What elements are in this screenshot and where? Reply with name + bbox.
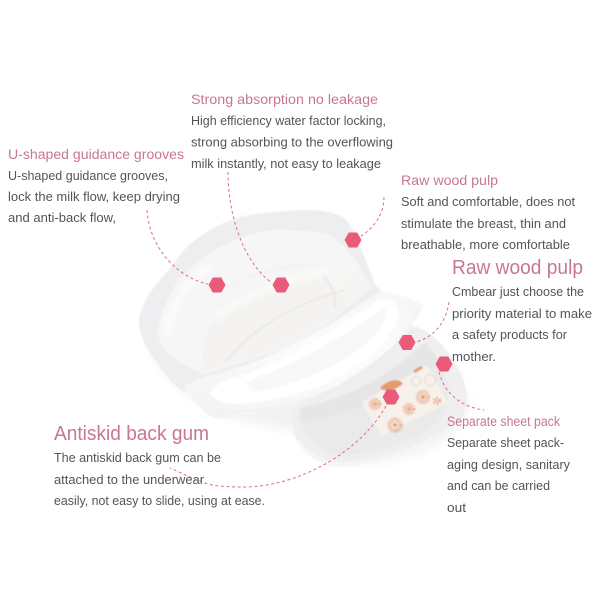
hexagon marker: raw wood pulp material: [398, 335, 416, 350]
hexagon marker: U-shaped grooves: [208, 278, 226, 292]
text block: strong absorption: [191, 114, 393, 171]
soft drop shadow: [150, 350, 468, 462]
text block: raw wood pulp material: Cmbear just choose the: [452, 285, 584, 299]
text block: raw wood pulp comfort: [401, 195, 576, 252]
text block: raw wood pulp material: a safety products for: [452, 328, 567, 342]
hexagon marker: antiskid back gum: [382, 390, 400, 404]
heading: antiskid back gum: Antiskid back gum: [54, 423, 209, 445]
text block: raw wood pulp material: priority material to make: [452, 307, 592, 321]
text block: U-shaped guidance grooves: and anti-back flow,: [8, 211, 116, 225]
text block: raw wood pulp material: [452, 285, 592, 364]
heading: strong absorption: Strong absorption no leakage: [191, 92, 378, 107]
text block: separate sheet pack: aging design, sanitary: [447, 458, 571, 472]
text block: raw wood pulp comfort: Soft and comfortable, does not: [401, 195, 576, 209]
panel: raw wood pulp comfort: [401, 173, 576, 252]
heading: raw wood pulp large: Raw wood pulp: [452, 257, 583, 279]
text block: antiskid back gum: attached to the underwear: [54, 473, 204, 487]
hexagon marker: strong absorption: [272, 278, 290, 292]
text block: separate sheet pack: out: [447, 501, 467, 515]
text block: antiskid back gum: The antiskid back gum can be: [54, 451, 221, 465]
sticker with flower print: [362, 365, 448, 436]
text block: raw wood pulp material: mother.: [452, 350, 496, 364]
text block: U-shaped guidance grooves: lock the milk flow, keep drying: [8, 190, 180, 204]
text block: strong absorption: High efficiency water factor locking,: [191, 114, 386, 128]
hexagon marker: raw wood pulp top: [344, 232, 362, 248]
text block: antiskid back gum: [54, 451, 265, 508]
upper pad outer shell: [139, 210, 383, 400]
panel: strong absorption: [191, 92, 393, 171]
text block: strong absorption: milk instantly, not easy to leakage: [191, 157, 381, 171]
panel: U-shaped guidance grooves: [8, 147, 184, 225]
panel: antiskid back gum: [54, 423, 265, 508]
dashed leader lines: [147, 172, 484, 487]
panel: raw wood pulp material: [452, 257, 592, 364]
upper pad absorbent core: [158, 230, 373, 374]
text block: strong absorption: strong absorbing to the overflowing: [191, 136, 393, 150]
text block: antiskid back gum: easily, not easy to slide, using at ease.: [54, 494, 265, 508]
heading: separate sheet pack: Separate sheet pack: [447, 414, 560, 429]
back pad: [292, 325, 467, 467]
heading: raw wood pulp small: Raw wood pulp: [401, 173, 498, 188]
heading: U-shaped guidance grooves: U-shaped guidance grooves: [8, 147, 184, 162]
text block: raw wood pulp comfort: breathable, more comfortable: [401, 238, 570, 252]
text block: U-shaped guidance grooves: U-shaped guidance grooves,: [8, 169, 168, 183]
text block: separate sheet pack: Separate sheet pack-: [447, 436, 564, 450]
text block: raw wood pulp comfort: stimulate the breast, thin and: [401, 217, 566, 231]
panel: separate sheet pack: [447, 414, 571, 515]
text block: separate sheet pack: [447, 436, 571, 515]
text block: separate sheet pack: and can be carried: [447, 479, 550, 493]
hexagon marker: separate sheet pack: [436, 356, 452, 372]
product illustration: nursing pads: [139, 210, 468, 467]
lower pad flap: [183, 292, 423, 418]
text block: U-shaped guidance grooves: [8, 169, 180, 225]
